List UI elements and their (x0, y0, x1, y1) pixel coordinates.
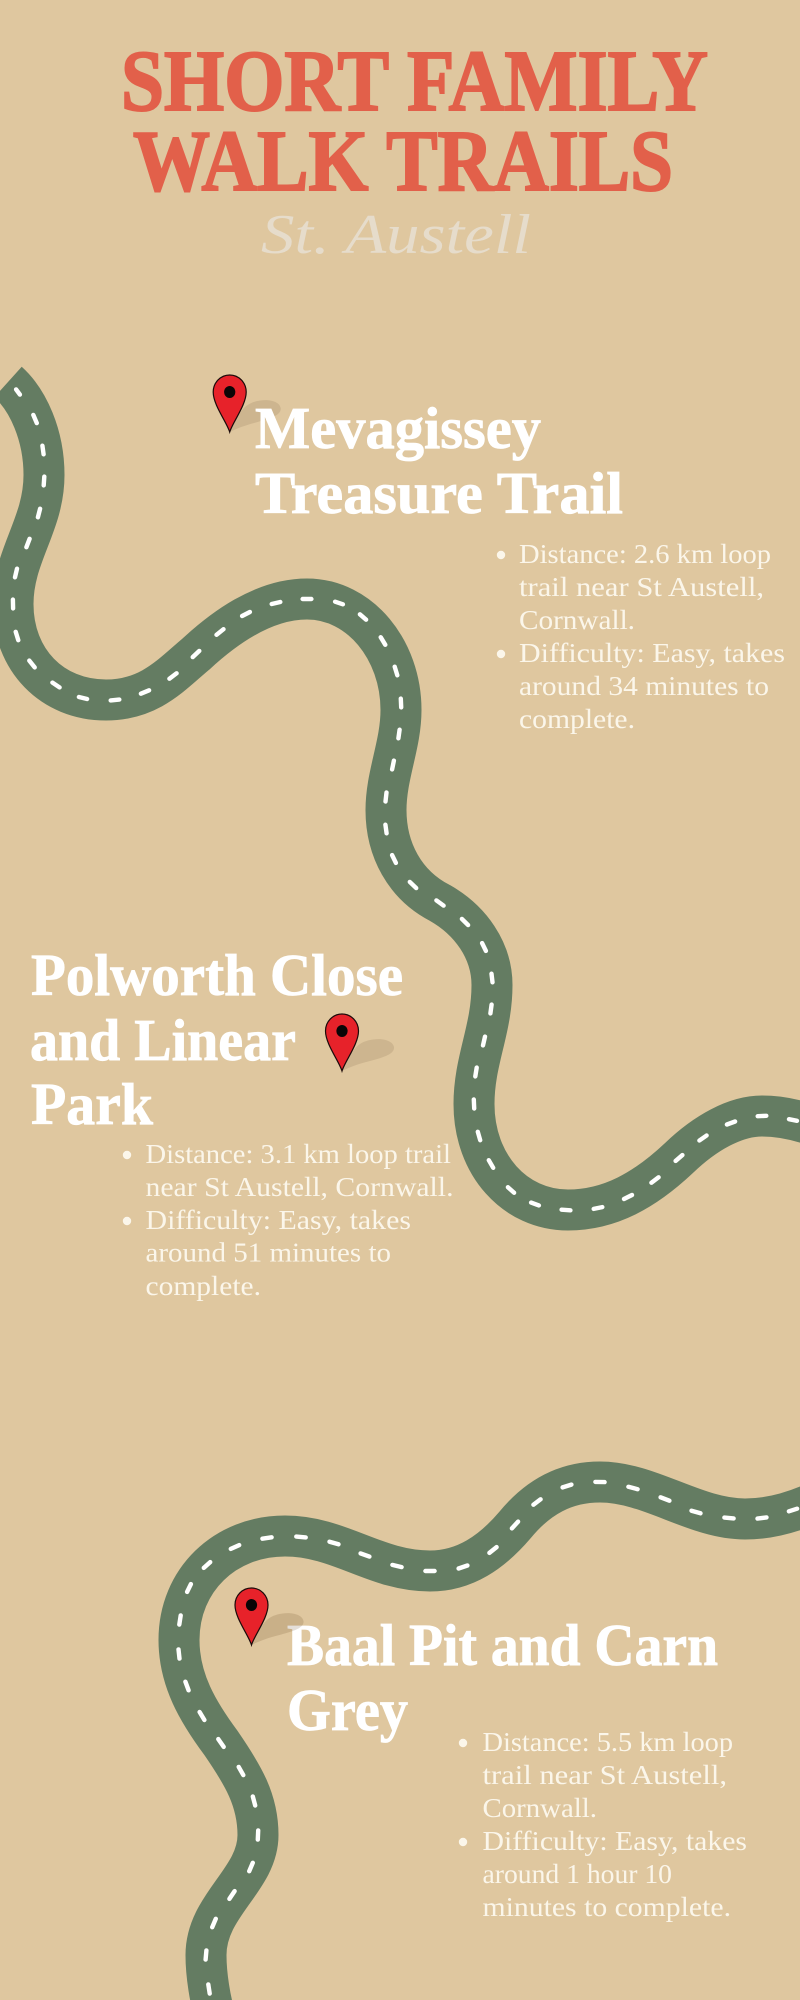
title: SHORT FAMILY (121, 32, 708, 129)
icon: map pin 3 (235, 1588, 304, 1645)
heading: Mevagissey Treasure Trail (255, 395, 623, 526)
panel: Polworth Close and Linear Park (30, 942, 454, 1301)
bullet list: Mevagissey details: Difficulty: Easy, takes (519, 638, 785, 668)
heading: Baal Pit and Carn Grey (287, 1612, 718, 1743)
heading: Polworth Close and Linear Park: Polworth Close (31, 942, 403, 1008)
title (121, 32, 708, 209)
bullet list: Polworth details: near St Austell, Cornwall. (146, 1172, 454, 1202)
bullet list: Mevagissey details: around 34 minutes to (519, 671, 769, 701)
bullet list: Mevagissey details: Distance: 2.6 km loop (519, 539, 771, 569)
heading: Mevagissey Treasure Trail: Mevagissey (255, 395, 541, 461)
road: lower winding trail (178, 1482, 800, 2000)
bullet list: Polworth details: Distance: 3.1 km loop trail (146, 1139, 451, 1169)
road: upper winding trail (8, 382, 800, 1210)
bullet list: Mevagissey details (497, 539, 785, 734)
bullet list: Polworth details: complete. (146, 1271, 261, 1301)
heading: Polworth Close and Linear Park: Park (31, 1071, 153, 1137)
heading: Mevagissey Treasure Trail: Treasure Trail (255, 460, 623, 526)
heading: Polworth Close and Linear Park (30, 942, 403, 1137)
bullet list: Baal Pit details: minutes to complete. (482, 1892, 731, 1922)
bullet list: Baal Pit details: Distance: 5.5 km loop (482, 1727, 733, 1757)
bullet list: Polworth details (123, 1139, 454, 1301)
bullet list: Mevagissey details: Cornwall. (519, 605, 635, 635)
bullet list: Mevagissey details: trail near St Austell, (519, 572, 764, 602)
bullet list: Baal Pit details: Cornwall. (482, 1793, 597, 1823)
panel: Baal Pit and Carn Grey (235, 1588, 747, 1922)
heading: Polworth Close and Linear Park: and Linear (30, 1007, 296, 1073)
title: WALK TRAILS (133, 112, 673, 209)
bullet list: Polworth details: around 51 minutes to (146, 1238, 391, 1268)
bullet list: Baal Pit details: Difficulty: Easy, takes (482, 1826, 747, 1856)
icon: map pin 1 (213, 375, 281, 432)
icon: map pin 2 (326, 1014, 394, 1071)
heading: Baal Pit and Carn Grey: Baal Pit and Carn (287, 1612, 718, 1678)
subtitle: St. Austell (261, 204, 531, 266)
bullet list: Mevagissey details: complete. (519, 704, 635, 734)
bullet list: Baal Pit details: trail near St Austell, (482, 1760, 727, 1790)
bullet list: Baal Pit details: around 1 hour 10 (482, 1859, 672, 1889)
bullet list: Baal Pit details (459, 1727, 747, 1922)
panel: Mevagissey Treasure Trail (213, 375, 785, 734)
bullet list: Polworth details: Difficulty: Easy, takes (146, 1205, 411, 1235)
heading: Baal Pit and Carn Grey: Grey (287, 1677, 408, 1743)
